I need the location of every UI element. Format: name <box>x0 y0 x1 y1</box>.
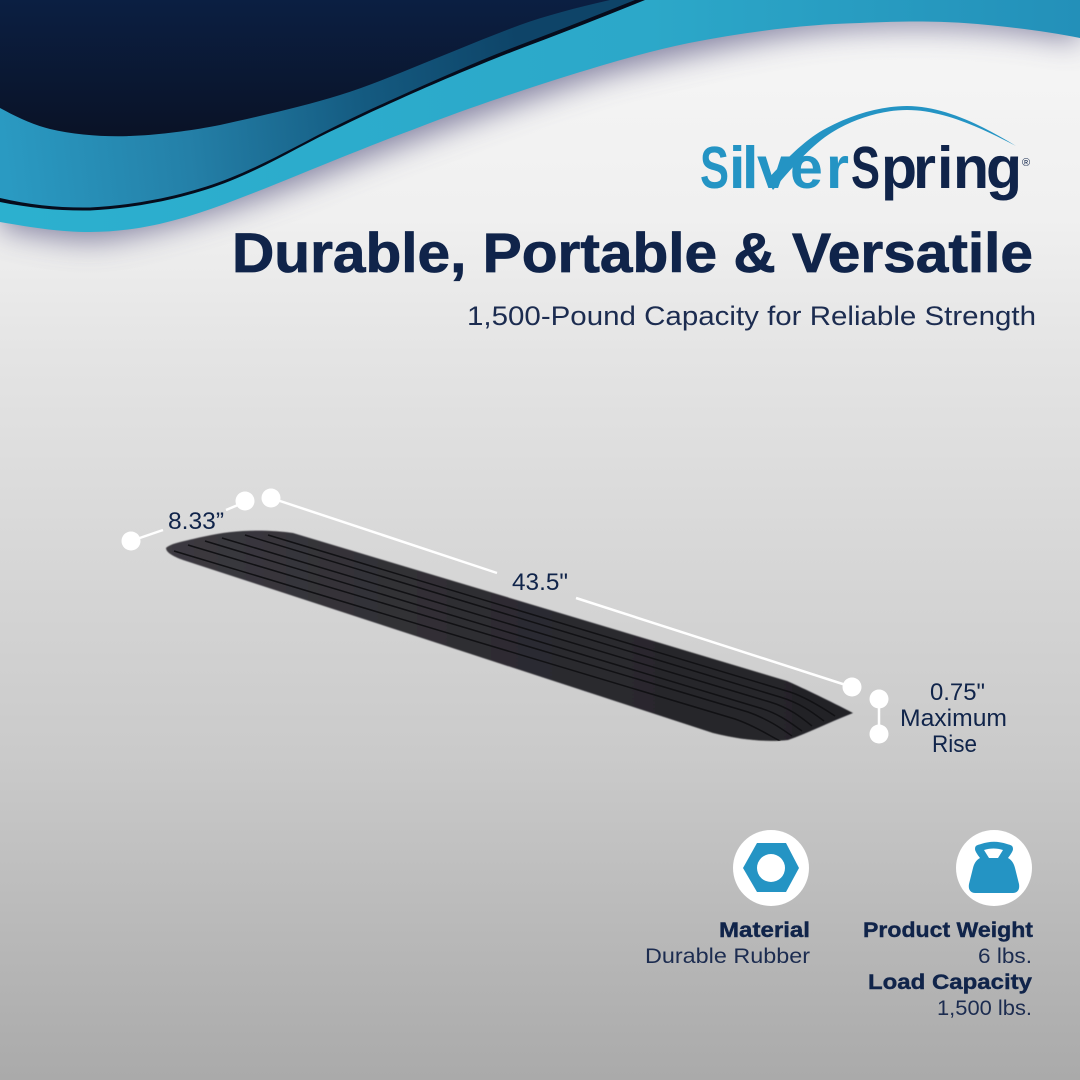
width label: 8.33” <box>168 508 224 535</box>
load capacity label: Load Capacity <box>868 971 1032 994</box>
logo arc <box>767 106 1016 190</box>
spec: material <box>645 830 810 968</box>
length label: 43.5" <box>512 569 568 596</box>
title: Durable, Portable & Versatile <box>232 221 1033 284</box>
logo word Silver: S <box>700 135 729 201</box>
product weight label: Product Weight <box>863 919 1033 942</box>
material label: Material <box>719 919 810 942</box>
header wave <box>0 0 1080 232</box>
wave: light teal band <box>0 0 1080 232</box>
threshold ramp product photo <box>166 531 853 742</box>
width dimension line and dots <box>122 492 254 550</box>
icon: kettlebell weight <box>956 830 1032 906</box>
logo registered mark: ® <box>1022 157 1030 169</box>
rise dimension line and dots <box>870 690 888 744</box>
rise label: 0.75" <box>930 679 985 706</box>
logo word Spring: S <box>851 135 880 201</box>
icon: hex nut <box>733 830 809 906</box>
ramp body <box>166 531 853 741</box>
logo word Spring: pring <box>881 135 1022 201</box>
dimension: width 8.33 inches <box>122 492 254 550</box>
logo word Silver: ilver <box>729 135 849 201</box>
logo: SilverSpring <box>700 106 1030 201</box>
subtitle: 1,500-Pound Capacity for Reliable Strength <box>467 301 1036 331</box>
rise label <box>900 679 1007 758</box>
wave: black line <box>0 0 645 211</box>
rise label: Maximum <box>900 705 1007 732</box>
wave: mid blue band <box>0 0 635 208</box>
wave shadow <box>0 0 1080 240</box>
dimension: length 43.5 inches <box>262 488 862 696</box>
product weight value: 6 lbs. <box>978 945 1032 968</box>
ramp ridges <box>174 535 835 742</box>
material value: Durable Rubber <box>645 945 810 968</box>
rise label: Rise <box>932 731 977 758</box>
length dimension line and dots <box>262 488 862 696</box>
dimension: rise 0.75 inches <box>870 679 1007 758</box>
spec: weight and capacity <box>863 830 1033 1020</box>
wave: navy field <box>0 0 610 136</box>
load capacity value: 1,500 lbs. <box>937 997 1032 1020</box>
